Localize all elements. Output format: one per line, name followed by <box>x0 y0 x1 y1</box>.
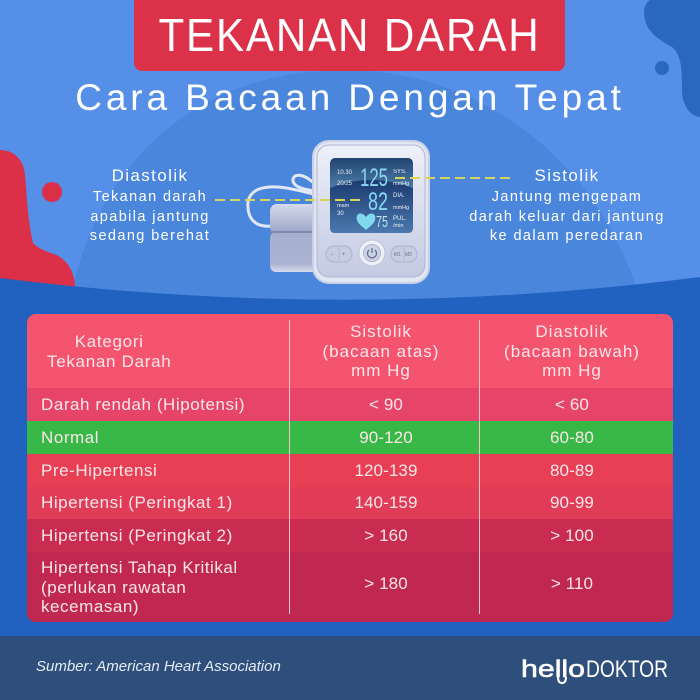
table <box>27 314 673 622</box>
row: peringkat 1: Hipertensi (Peringkat 1) <box>41 493 233 512</box>
row: kritikal <box>27 552 673 622</box>
diastolic heading: (bacaan bawah) <box>504 342 640 360</box>
diastolik text: apabila jantung <box>90 208 210 224</box>
blood pressure monitor illustration: 20/25 <box>337 181 353 187</box>
row: normal: Normal <box>41 428 99 447</box>
row: hipotensi: Darah rendah (Hipotensi) <box>41 395 245 414</box>
systolic heading: (bacaan atas) <box>323 342 439 360</box>
blood pressure monitor illustration: M1 <box>394 252 401 258</box>
row: pre-hipertensi: 120-139 <box>354 461 418 480</box>
subtitle: Cara Bacaan Dengan Tepat <box>75 77 625 118</box>
sistolik text: Sistolik <box>534 166 600 185</box>
blood pressure monitor illustration: DIA. <box>393 193 405 199</box>
row: kritikal: > 180 <box>364 574 408 593</box>
sistolik text: ke dalam peredaran <box>490 228 644 244</box>
diastolic heading: mm Hg <box>542 361 602 380</box>
diastolik text <box>90 166 210 244</box>
row: pre-hipertensi <box>27 454 673 487</box>
blood pressure monitor illustration: mmHg <box>393 181 409 187</box>
blood pressure monitor illustration: mmHg <box>393 205 409 211</box>
row: peringkat 1 <box>27 487 673 519</box>
row: peringkat 2: Hipertensi (Peringkat 2) <box>41 526 233 545</box>
row: pre-hipertensi: 80-89 <box>550 461 594 480</box>
blood pressure monitor illustration: mam <box>337 203 350 209</box>
blood pressure monitor illustration: 10.30 <box>337 170 353 176</box>
row: peringkat 2 <box>27 519 673 552</box>
logo: hello <box>521 656 585 683</box>
sistolik dashed line <box>395 177 510 179</box>
blood pressure monitor illustration: SYS. <box>393 169 407 175</box>
category heading: Tekanan Darah <box>47 352 171 370</box>
systolic heading <box>323 322 439 380</box>
blood pressure monitor illustration: /min <box>393 223 403 229</box>
row: peringkat 2: > 100 <box>550 526 594 545</box>
table header <box>27 314 673 388</box>
row: normal <box>27 421 673 454</box>
category heading <box>47 332 171 370</box>
diastolik dashed line <box>215 199 360 201</box>
blood pressure monitor illustration: PUL. <box>393 216 407 222</box>
blood pressure monitor illustration: 125 <box>360 164 388 192</box>
diastolik text: Tekanan darah <box>93 189 207 205</box>
diastolik text: Diastolik <box>112 166 188 185</box>
diastolik text: sedang berehat <box>90 228 210 244</box>
logo <box>521 656 668 684</box>
row: kritikal: > 110 <box>551 574 593 593</box>
title: TEKANAN DARAH <box>158 9 541 61</box>
row: kritikal: (perlukan rawatan <box>41 578 186 596</box>
systolic heading: mm Hg <box>351 361 411 380</box>
row: kritikal: kecemasan) <box>41 597 139 616</box>
blood pressure monitor illustration: + <box>342 252 346 258</box>
sistolik text: Jantung mengepam <box>492 189 642 205</box>
systolic heading: Sistolik <box>350 322 412 341</box>
sistolik text <box>469 166 665 244</box>
row: hipotensi: < 60 <box>555 395 589 414</box>
row: peringkat 1: 140-159 <box>354 493 418 512</box>
blood pressure monitor illustration: - <box>331 252 333 258</box>
blood pressure monitor illustration: M2 <box>405 252 412 258</box>
row: normal: 90-120 <box>359 428 413 447</box>
blood pressure monitor illustration: 30 <box>337 211 344 217</box>
source: Sumber: American Heart Association <box>36 658 281 675</box>
row: kritikal: Hipertensi Tahap Kritikal <box>41 558 238 577</box>
title banner <box>134 0 565 71</box>
row: hipotensi <box>27 388 673 421</box>
row: peringkat 2: > 160 <box>364 526 408 545</box>
row: peringkat 1: 90-99 <box>550 493 594 512</box>
row: pre-hipertensi: Pre-Hipertensi <box>41 461 157 480</box>
row: normal: 60-80 <box>550 428 594 447</box>
diastolic heading <box>504 322 640 380</box>
sistolik text: darah keluar dari jantung <box>469 208 665 224</box>
category heading: Kategori <box>75 332 144 351</box>
diastolic heading: Diastolik <box>535 322 609 341</box>
blood pressure monitor illustration <box>246 140 430 284</box>
blood pressure monitor illustration: 82 <box>368 188 388 216</box>
row: hipotensi: < 90 <box>369 395 403 414</box>
blood pressure monitor illustration: 75 <box>376 214 388 231</box>
